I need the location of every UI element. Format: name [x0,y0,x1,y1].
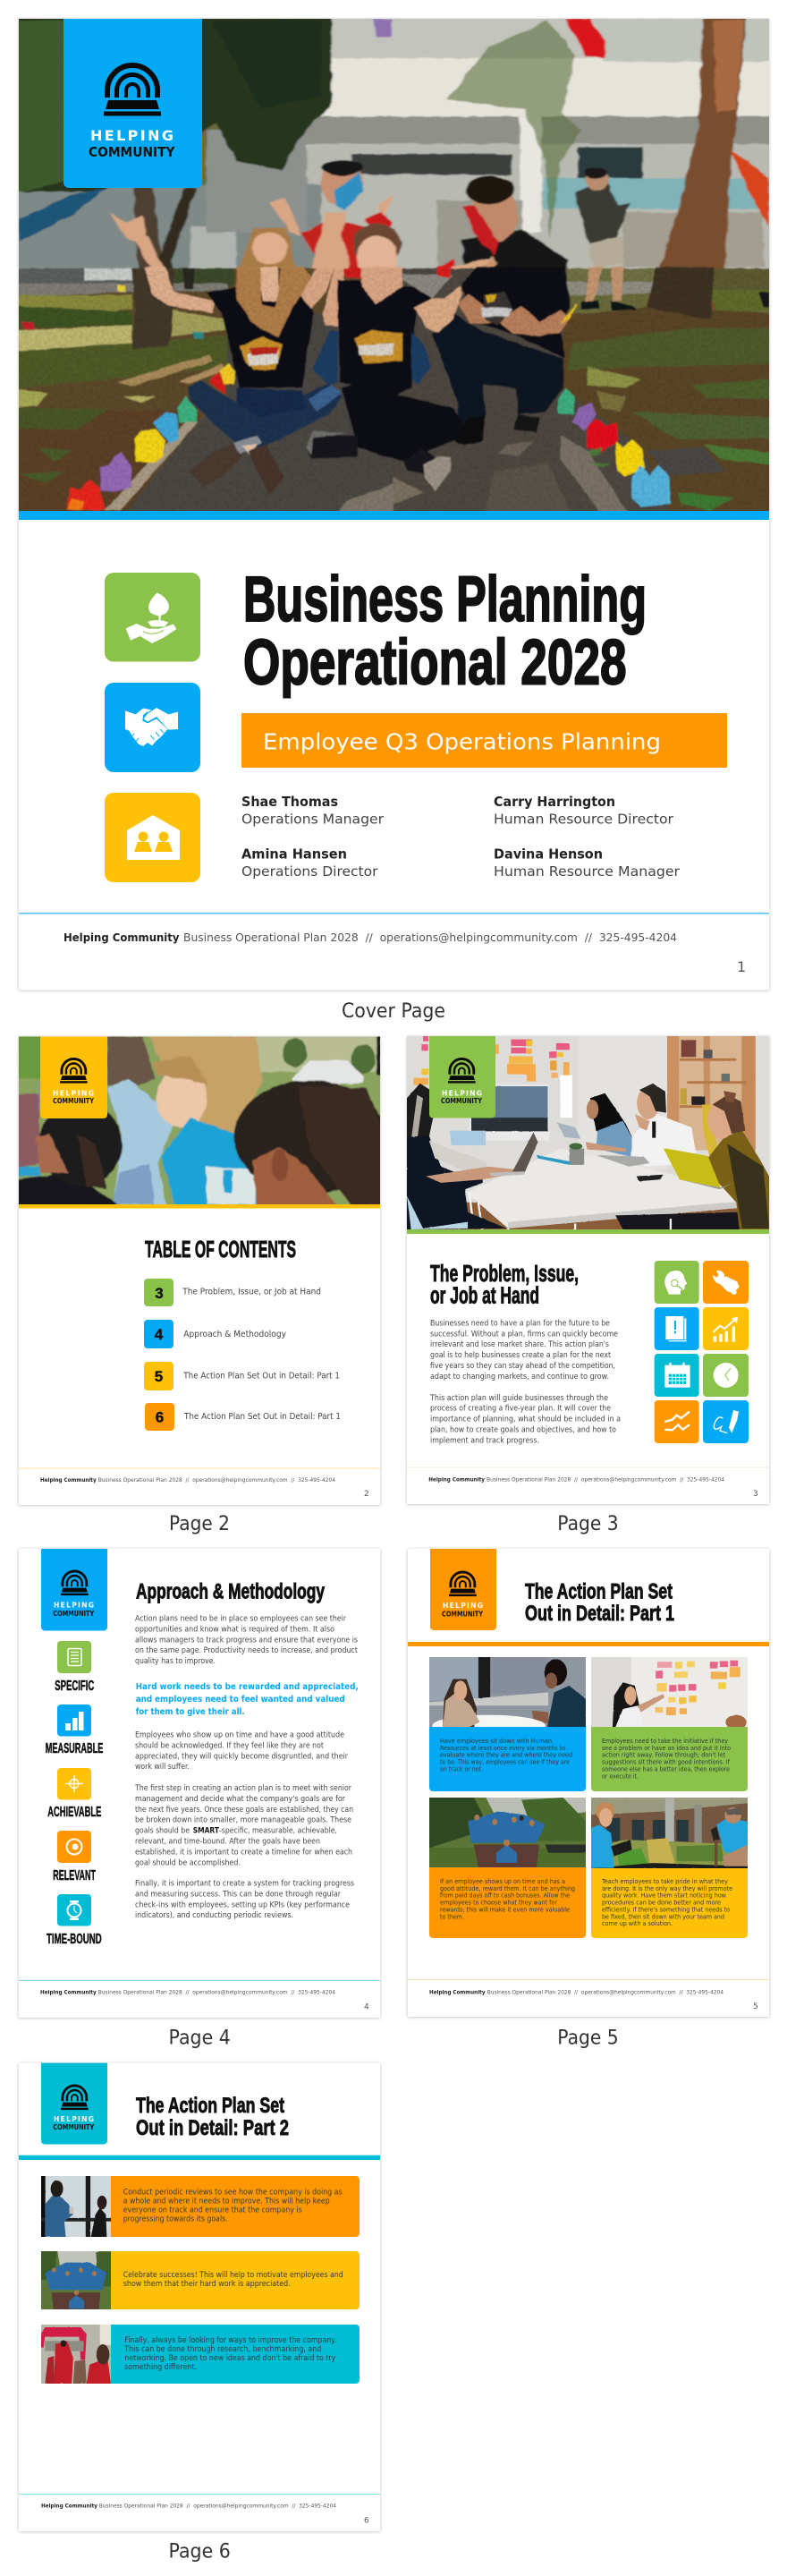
heading: action plan part 1: Out in Detail: Part 1 [525,1602,674,1626]
body text: problem: plan, how to create goals and objectives, and how to [430,1426,616,1435]
smart item: measurable: MEASURABLE [46,1741,103,1756]
smart item: relevant: RELEVANT [53,1868,96,1883]
panel: page 6 action plan part 2 [19,2063,380,2531]
card: human resources check-in: evaluate where they are and where they need [440,1751,572,1759]
row: periodic reviews: Conduct periodic reviews to see how the company is doing as [123,2189,343,2198]
logo badge: orange: HELPING [443,1602,483,1610]
card: reward employees: good attitude, reward them. It can be anything [440,1884,575,1892]
panel: cover page [0,0,787,990]
icon: pen signature [703,1400,749,1443]
card: reward employees: rewards; this will make it even more valuable [440,1905,571,1913]
photo: team meeting around table [407,1036,769,1229]
photo: two colleagues by window [41,2176,111,2237]
body text: smart goals paragraph: goal should be accomplished. [135,1858,241,1867]
card: take the initiative: suggestions sit there with good intentions. If [602,1757,730,1766]
page 4 footer [40,1988,369,2011]
body text: intro paragraph [135,1614,358,1666]
row: celebrate successes: show them that their hard work is appreciated. [123,2280,291,2289]
card: take pride: come up with a solution. [602,1919,673,1927]
page 6 footer: 6 [364,2516,369,2525]
people list: Carry Harrington [494,794,615,810]
card: human resources check-in [423,1653,590,1791]
row: keep improving [36,2319,360,2386]
logo badge: orange: COMMUNITY [442,1611,483,1618]
page 6 footer: Helping Community [41,2502,98,2509]
row: periodic reviews: everyone on track and ensure that the company is [123,2206,302,2215]
cover footer: Helping Community [63,931,180,944]
icon: notebook with exclamation [655,1307,699,1350]
heading: the problem [430,1262,579,1308]
icon: handshake [105,683,200,772]
logo badge: yellow: COMMUNITY [53,1097,94,1105]
icon: rising bar chart [703,1307,749,1350]
card: human resources check-in: on track or not. [440,1764,483,1773]
body text: attitude paragraph: Employees who show up on time and have a good attitude [135,1730,344,1739]
page 4 footer: Helping Community [40,1988,97,1995]
body text: smart goals paragraph: management and decide what the company's goals are for [135,1795,345,1804]
body text: problem: Businesses need to have a plan for the future to be [430,1319,610,1328]
callout: highlighted statement [136,1682,359,1717]
card: take pride: procedures can be done better and more [602,1899,722,1906]
smart item: specific [55,1641,94,1694]
page 2 footer [40,1476,369,1499]
callout: highlighted statement: for them to give their all. [136,1707,245,1717]
card: reward employees: from paid days off to cash bonuses. Allow the [440,1892,571,1900]
body text: tracking paragraph: and measuring success. This can be done through regular [135,1890,341,1899]
panel: page 3 problem statement [394,1020,781,1504]
callout: highlighted statement: and employees need to feel wanted and valued [136,1695,345,1705]
panel: page 5 action plan part 1 [408,1549,769,2017]
card: human resources check-in: to be. This way, employees can see if they are [440,1757,570,1766]
photo: volunteers on a truck [429,1798,586,1867]
body text: tracking paragraph [135,1879,354,1920]
card: take the initiative [584,1653,754,1791]
card: take the initiative: Employees need to take the initiative if they [602,1737,729,1745]
heading: action plan part 2 [136,2094,289,2140]
heading: approach and methodology: Approach & Methodology [136,1580,325,1604]
logo badge: blue [41,1549,107,1630]
page 5 footer: Helping Community [429,1988,486,1995]
card: reward employees: to them. [440,1912,464,1920]
icon grid [655,1261,749,1443]
body text: tracking paragraph: indicators), and conducting periodic reviews. [135,1911,293,1920]
logo badge: teal: COMMUNITY [53,2123,95,2131]
photo: woman at sticky-note wall [591,1657,748,1727]
page 2 footer: 2 [364,1490,369,1499]
smart item: achievable: ACHIEVABLE [47,1805,101,1820]
contents item 4: 4 [155,1326,164,1343]
body text: smart goals paragraph: goals should be [135,1827,190,1836]
photo: gardening volunteers [591,1798,748,1868]
people list: Operations Director [241,863,378,880]
logo badge: green: HELPING [442,1090,482,1097]
page 3 footer [428,1476,758,1499]
page 3 footer: Business Operational Plan 2028 // operations@helpingcommunity.com // 325-495-4204 [487,1476,724,1484]
card: take pride [584,1791,754,1938]
card: take the initiative: action right away. Follow through; don't let [602,1751,725,1759]
photo: volunteers on a truck [41,2251,111,2309]
body text: attitude paragraph: should be acknowledged. If they feel like they are not [135,1741,324,1750]
body text: tracking paragraph: Finally, it is important to create a system for tracking progress [135,1879,354,1888]
row: keep improving: networking. Be open to new ideas and don't be afraid to try [124,2354,335,2363]
contents item 6: 6 [156,1408,164,1426]
smart item: relevant [53,1831,96,1883]
photo: two women talking [429,1657,586,1727]
heading: action plan part 2: The Action Plan Set [136,2094,284,2118]
body text: problem [429,1319,621,1445]
contents item 6 [145,1403,341,1431]
people list: Davina Henson [494,846,603,863]
heading: action plan part 2: Out in Detail: Part 2 [136,2116,289,2140]
heading: table of contents: TABLE OF CONTENTS [145,1236,296,1262]
body text: problem: This action plan will guide businesses through the [429,1394,608,1403]
body text: tracking paragraph: check-ins with employees, setting up KPIs (key performance [135,1900,350,1909]
logo badge: yellow [40,1036,107,1118]
body text: problem: process of creating a five-year plan. It will cover the [430,1405,611,1414]
body text: intro paragraph: allows managers to track progress and ensure that everyone is [135,1636,358,1645]
card: take pride: quality work. Have them start noticing how [602,1892,726,1900]
icon: house with people [105,793,200,882]
card: take the initiative: or execute it. [602,1772,639,1780]
body text: smart goals paragraph [134,1784,353,1867]
body text: smart goals paragraph: established, it is important to create a timeline for when each [135,1848,352,1857]
page 6 footer [41,2502,369,2525]
people list: Amina Hansen [241,846,347,863]
contents item 4 [144,1320,286,1348]
contents item 5: 5 [155,1368,163,1385]
contents item 6: The Action Plan Set Out in Detail: Part 1 [183,1412,341,1422]
contents item 4: Approach & Methodology [183,1330,286,1339]
row: periodic reviews: a whole and where it needs to improve. This will help keep [123,2198,330,2206]
people list: Shae Thomas [241,794,338,810]
heading: the problem: or Job at Hand [430,1283,539,1308]
logo badge: green: COMMUNITY [441,1097,482,1105]
body text: intro paragraph: on the same page. Productivity needs to increase, and product [135,1646,358,1655]
cover footer: 1 [737,958,746,975]
card: human resources check-in: Resources at least once every six months to [440,1744,565,1752]
card: take pride: are doing. It is the only way they will promote [602,1884,733,1892]
heading: action plan part 1: The Action Plan Set [525,1580,673,1604]
smart item: time-bound: TIME-BOUND [47,1932,102,1947]
card: human resources check-in: Have employees sit down with Human [440,1737,552,1745]
body text: intro paragraph: quality has to improve. [135,1657,216,1666]
logo badge: blue: COMMUNITY [89,144,176,160]
contents item 5 [144,1362,340,1390]
heading: the problem: The Problem, Issue, [430,1262,579,1287]
page 3 footer: 3 [753,1490,758,1499]
page 5 footer: 5 [753,2002,758,2011]
icon: wrench [703,1261,749,1304]
icon: calendar [655,1354,699,1397]
logo badge: blue [63,19,202,188]
colour band under page 2 photo [19,1204,380,1208]
people list: Human Resource Manager [494,863,681,880]
page 5 footer [429,1988,758,2011]
logo badge: blue: HELPING [90,127,173,144]
card: take pride: efficiently. If there's something that needs to [602,1905,730,1913]
logo badge: teal [41,2063,107,2144]
page 3 footer: Helping Community [428,1476,486,1484]
smart item: specific: SPECIFIC [55,1679,94,1694]
body text: problem: implement and track progress. [430,1436,539,1445]
body text: problem: importance of planning, what should be included in a [430,1416,621,1424]
page 4 footer: 4 [364,2002,369,2011]
panel: page 4 approach and methodology [19,1549,380,2018]
body text: problem: successful. Without a plan, firms can quickly become [430,1330,618,1339]
contents item 3 [144,1279,321,1306]
body text: attitude paragraph: appreciated, they will quickly become disgruntled, and their [135,1752,348,1761]
body text: problem: irrelevant and lose market share. This action plan's [430,1340,609,1349]
icon: clock [703,1354,749,1397]
page 6 footer: Business Operational Plan 2028 // operations@helpingcommunity.com // 325-495-4204 [99,2502,336,2509]
cover footer [63,931,746,975]
label: page 2: Page 2 [169,1513,230,1535]
contents item 3: The Problem, Issue, or Job at Hand [182,1288,321,1297]
label: page 4: Page 4 [168,2028,231,2049]
card: take pride: be fixed, then sit down with your team and [602,1912,724,1920]
row: keep improving: Finally, always be looking for ways to improve the company. [124,2336,336,2345]
smart item: achievable [47,1768,101,1820]
card: reward employees: employees to choose what they want for [440,1899,557,1906]
icon: line graphs [655,1400,699,1443]
card: take the initiative: see a problem or have an idea and put it into [602,1744,731,1752]
label: cover page: Cover Page [342,1000,445,1023]
body text: problem: adapt to changing markets, and continue to grow. [430,1373,609,1382]
subtitle banner [241,713,727,768]
callout: highlighted statement: Hard work needs to be rewarded and appreciated, [136,1682,359,1692]
logo badge: green [429,1036,495,1118]
body text: smart goals paragraph: relevant, and time-bound. After the goals have been [135,1838,320,1847]
label: page 5: Page 5 [557,2028,619,2049]
row: keep improving: This can be done through research, benchmarking, and [123,2345,321,2354]
people list [241,794,681,880]
body text: problem: goal is to help businesses create a plan for the next [430,1351,611,1360]
card: take the initiative: someone else has a better idea, then explore [602,1764,731,1773]
row: periodic reviews [36,2170,360,2242]
people list: Human Resource Director [494,811,674,827]
people list: Operations Manager [241,811,385,827]
title: Operational 2028 [243,628,627,699]
page 4 footer: Business Operational Plan 2028 // operations@helpingcommunity.com // 325-495-4204 [98,1988,335,1995]
logo badge: blue: COMMUNITY [53,1610,95,1618]
label: page 6: Page 6 [168,2541,231,2563]
body text: smart goals paragraph: be broken down into smaller, more manageable goals. These [135,1816,351,1825]
colour band [19,2155,380,2160]
colour band [408,1642,769,1646]
logo badge: orange [430,1549,496,1630]
body text: intro paragraph: Action plans need to be in place so employees can see their [135,1614,346,1623]
body text: intro paragraph: opportunities and know what is required of them. It also [135,1625,334,1634]
body text: smart goals paragraph: The first step in creating an action plan is to meet with senior [134,1784,351,1793]
row: celebrate successes: Celebrate successes! This will help to motivate employees and [123,2271,343,2280]
body text: smart goals paragraph: -specific, measurable, achievable, [219,1827,337,1836]
body text: attitude paragraph [135,1730,348,1772]
icon: plant in hand [105,573,200,662]
contents item 5: The Action Plan Set Out in Detail: Part 1 [182,1371,340,1382]
row: celebrate successes [36,2246,360,2314]
card: reward employees: If an employee shows up on time and has a [440,1877,565,1885]
panel: page 2 table of contents [0,1020,387,1505]
smart item: time-bound [47,1894,102,1947]
photo: girls in blue shirts [19,1036,380,1204]
subtitle banner: Employee Q3 Operations Planning [263,728,661,755]
body text: smart goals paragraph: SMART [193,1827,219,1836]
label: page 3: Page 3 [557,1513,619,1535]
page 5 footer: Business Operational Plan 2028 // operations@helpingcommunity.com // 325-495-4204 [487,1988,724,1995]
smart item: measurable [46,1705,103,1756]
body text: attitude paragraph: work will suffer. [135,1763,190,1772]
body text: smart goals paragraph: the next five years. Once these goals are established, they can [135,1806,353,1815]
cover footer: Business Operational Plan 2028 // operations@helpingcommunity.com // 325-495-4204 [183,931,677,944]
photo: volunteers tossing paper lanterns [0,0,787,548]
logo badge: teal: HELPING [54,2115,94,2123]
photo: volunteers at finish arch [41,2325,111,2384]
logo badge: yellow: HELPING [53,1090,94,1097]
logo badge: blue: HELPING [54,1602,94,1609]
heading: action plan part 1 [525,1580,674,1626]
title [243,565,647,699]
colour band under page 3 photo [407,1229,769,1234]
page 2 footer: Business Operational Plan 2028 // operations@helpingcommunity.com // 325-495-4204 [98,1476,335,1484]
card: take pride: Teach employees to take pride in what they [601,1877,729,1885]
card: reward employees [423,1791,590,1938]
icon: head with headset [655,1261,699,1304]
colour band under cover photo [19,511,769,520]
body text: problem: five years so they can stay ahead of the competition, [430,1362,615,1371]
contents item 3: 3 [155,1285,164,1302]
row: periodic reviews: progressing towards its goals. [123,2215,228,2223]
row: keep improving: something different. [124,2363,197,2372]
page 2 footer: Helping Community [40,1476,97,1484]
